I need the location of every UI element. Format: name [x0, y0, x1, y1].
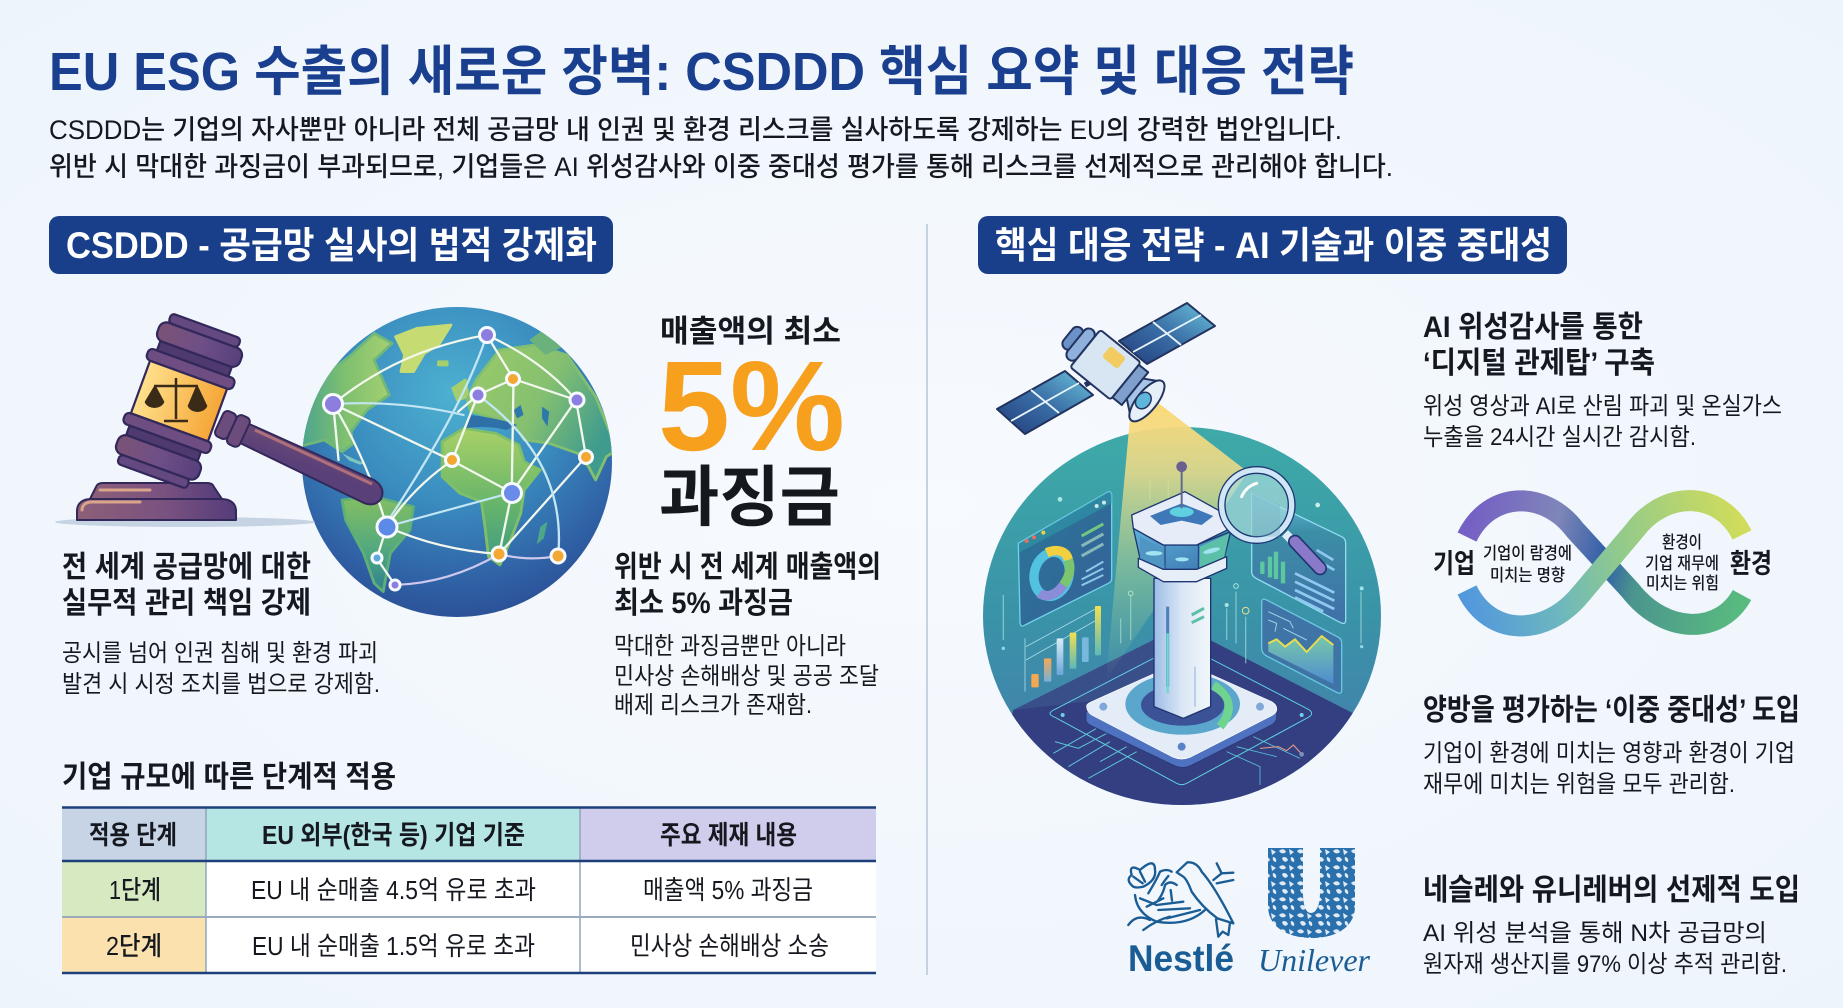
- text: penalty detail: 막대한 과징금뿐만 아니라: [614, 633, 846, 660]
- table: phased application: 주요 제재 내용: [660, 820, 797, 850]
- intro text: 위반 시 막대한 과징금이 부과되므로, 기업들은 AI 위성감사와 이중 중대성 평가를 통해 리스크를 선제적으로 관리해야 합니다.: [49, 152, 1393, 182]
- text: penalty detail: 위반 시 전 세계 매출액의: [614, 551, 881, 584]
- callout: 5% penalty: [658, 314, 845, 534]
- illustration: digital control tower: [983, 303, 1381, 813]
- intro text: CSDDD는 기업의 자사뿐만 아니라 전체 공급망 내 인권 및 환경 리스크를 실사하도록 강제하는 EU의 강력한 법안입니다.: [49, 115, 1342, 145]
- title: EU ESG 수출의 새로운 장벽: CSDDD 핵심 요약 및 대응 전략: [49, 42, 1354, 102]
- panel: report dashboard: [1252, 493, 1346, 623]
- light beam: [1106, 402, 1248, 680]
- table: phased application: [62, 807, 876, 973]
- text: AI satellite audit: 위성 영상과 AI로 산림 파괴 및 온실가스: [1423, 393, 1782, 420]
- logo: Nestle: Nestlé: [1128, 938, 1234, 979]
- diagram: double materiality infinity loop: 환경이: [1662, 533, 1702, 552]
- text: AI satellite audit: ‘디지털 관제탑’ 구축: [1423, 347, 1655, 380]
- logo: Nestle: [1128, 862, 1234, 979]
- icon: satellite: [997, 303, 1215, 434]
- text: supply chain responsibility: 공시를 넘어 인권 침해 및 환경 파괴: [62, 640, 378, 667]
- table: phased application: EU 내 순매출 1.5억 유로 초과: [252, 931, 535, 961]
- icon: magnifying glass: [1222, 470, 1320, 568]
- logo: Unilever: [1260, 848, 1370, 972]
- text: supply chain responsibility: 발견 시 시정 조치를 법으로 강제함.: [62, 671, 380, 698]
- logo: Unilever: Unilever: [1258, 942, 1371, 978]
- table: phased application: 민사상 손해배상 소송: [630, 931, 829, 961]
- diagram: double materiality infinity loop: [1433, 501, 1772, 626]
- callout: 5% penalty: 매출액의 최소: [660, 314, 841, 349]
- intro text: [49, 115, 1393, 182]
- diagram: double materiality infinity loop: 기업: [1433, 549, 1475, 579]
- tower pillar: [1154, 578, 1211, 718]
- table: phased application: 1단계: [109, 875, 161, 905]
- gavel handle: [213, 408, 382, 504]
- panel: donut dashboard: [1018, 492, 1112, 626]
- text: penalty detail: 배제 리스크가 존재함.: [614, 692, 812, 719]
- text: double materiality: 재무에 미치는 위험을 모두 관리함.: [1423, 771, 1735, 798]
- diagram: double materiality infinity loop: 미치는 명향: [1490, 566, 1565, 585]
- text: penalty detail: [614, 551, 881, 719]
- text: supply chain responsibility: [62, 551, 380, 698]
- text: penalty detail: 민사상 손해배상 및 공공 조달: [614, 663, 879, 690]
- text: double materiality: [1423, 694, 1800, 798]
- text: supply chain responsibility: 전 세계 공급망에 대한: [62, 551, 311, 584]
- icon: globe with network: [299, 307, 617, 617]
- diagram: double materiality infinity loop: 기업이 람경에: [1483, 544, 1572, 563]
- left section heading: CSDDD - 공급망 실사의 법적 강제화: [66, 225, 597, 266]
- text: AI satellite audit: [1423, 311, 1782, 451]
- right section heading: [978, 216, 1567, 274]
- diagram: double materiality infinity loop: 기업 재무에: [1645, 554, 1719, 573]
- left section heading: [49, 216, 613, 274]
- text: AI satellite audit: AI 위성감사를 통한: [1423, 311, 1643, 344]
- tower cab: [1132, 461, 1231, 582]
- text: AI satellite audit: 누출을 24시간 실시간 감시함.: [1423, 424, 1696, 451]
- text: Nestle and Unilever adoption: 원자재 생산지를 97% 이상 추적 관리함.: [1423, 951, 1787, 978]
- bar chart: [1025, 606, 1101, 692]
- text: double materiality: 기업이 환경에 미치는 영향과 환경이 기업: [1423, 740, 1795, 767]
- callout: 5% penalty: 과징금: [659, 460, 840, 534]
- table: phased application: 적용 단계: [89, 820, 177, 850]
- diagram: double materiality infinity loop: 환경: [1730, 549, 1772, 579]
- table: phased application: 매출액 5% 과징금: [643, 875, 813, 905]
- text: Nestle and Unilever adoption: AI 위성 분석을 통해 N차 공급망의: [1423, 920, 1767, 947]
- callout: 5% penalty: 5%: [658, 335, 845, 478]
- tower platform: [1086, 663, 1277, 768]
- table: phased application: EU 내 순매출 4.5억 유로 초과: [251, 875, 536, 905]
- text: Nestle and Unilever adoption: [1423, 874, 1800, 978]
- diagram: double materiality infinity loop: 미치는 위힘: [1646, 574, 1719, 593]
- table heading: 기업 규모에 따른 단계적 적용: [62, 761, 396, 794]
- text: penalty detail: 최소 5% 과징금: [614, 587, 793, 620]
- panel: line chart: [1262, 599, 1342, 693]
- text: supply chain responsibility: 실무적 관리 책임 강제: [62, 587, 311, 620]
- table: phased application: 2단계: [106, 931, 162, 961]
- gavel head: [108, 310, 250, 492]
- right section heading: 핵심 대응 전략 - AI 기술과 이중 중대성: [995, 225, 1552, 266]
- table: phased application: EU 외부(한국 등) 기업 기준: [262, 820, 525, 850]
- icon: gavel: [55, 310, 382, 527]
- text: Nestle and Unilever adoption: 네슬레와 유니레버의 선제적 도입: [1423, 874, 1800, 907]
